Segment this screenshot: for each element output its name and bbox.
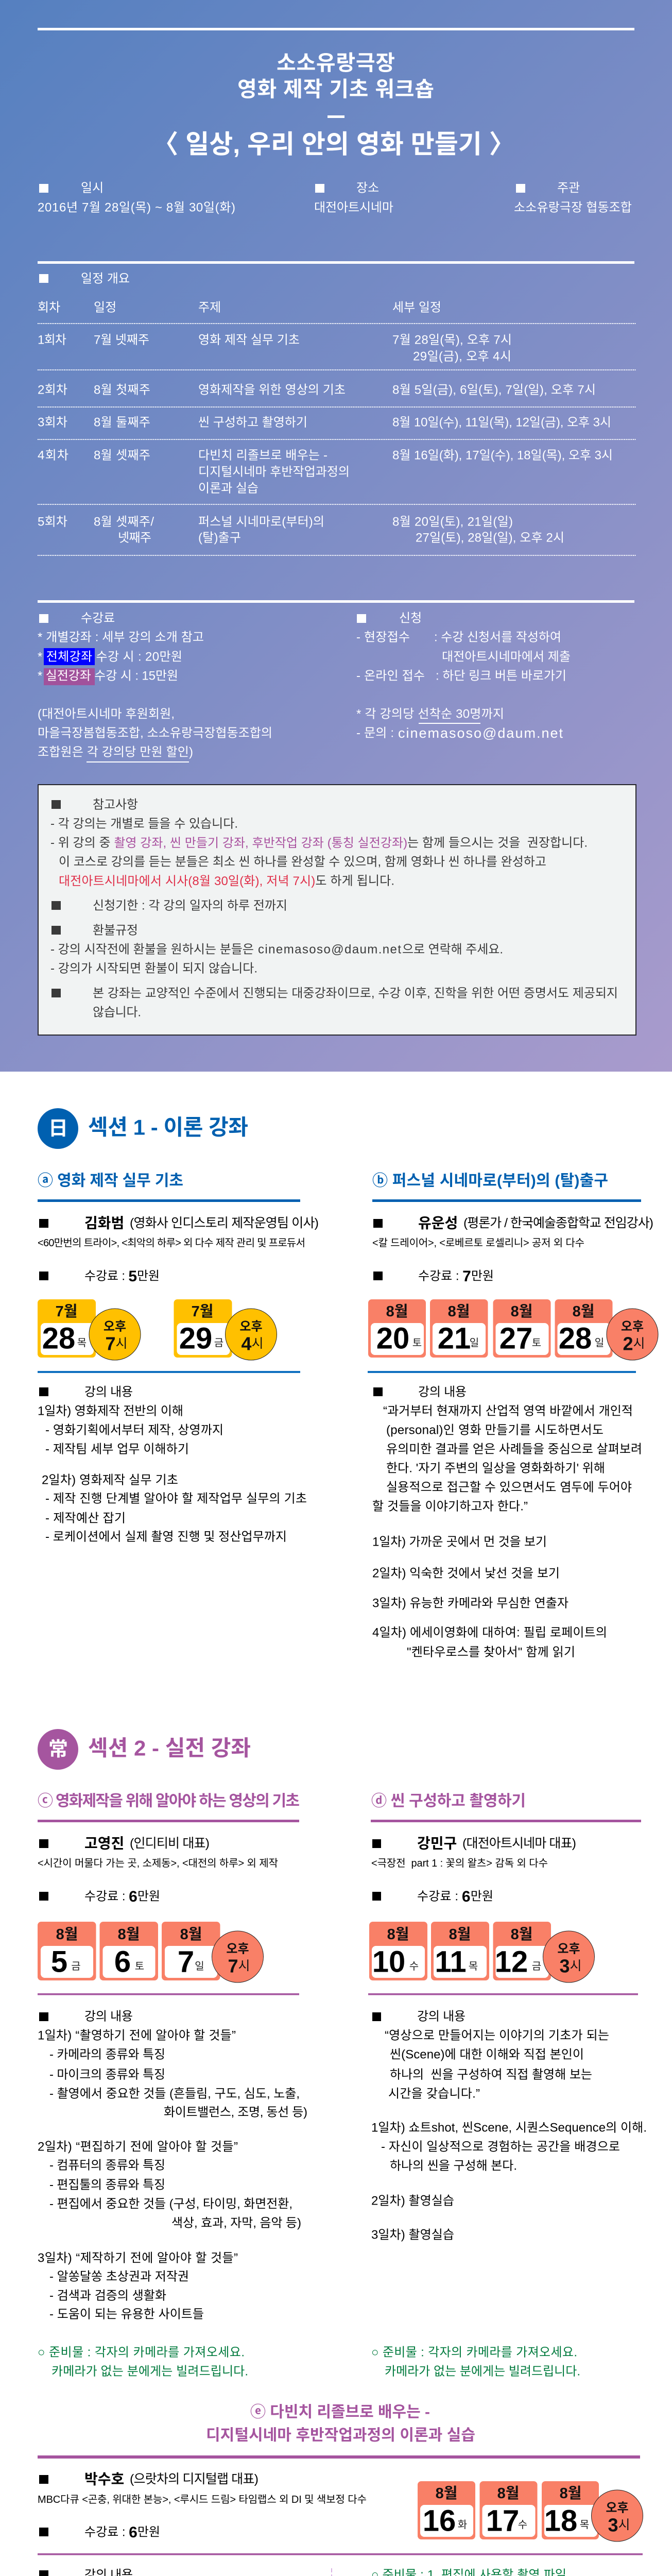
row 3: 8월 둘째주 [94,415,150,430]
row 4: 8월 셋째주 [94,448,150,463]
date badge: August 7 with time: 7 [178,1945,194,1978]
info: organizer [514,181,632,214]
lecture content: - 편집툴의 종류와 특징 [49,2178,165,2192]
date badge: August 18 with time [542,2481,643,2541]
row 1: 1회차 [38,333,66,347]
notes: certificate disclaimer: 않습니다. [93,1006,141,1019]
row 1: 7월 28일(목), 오후 7시 [392,333,512,347]
lecturer: (으랏차의 디지털랩 대표) [130,2472,259,2486]
title: theatre name: 소소유랑극장 [277,51,395,75]
lecture content [372,1385,642,1659]
panel: notes box [38,785,636,1035]
date badge: July 29: 7월 [192,1303,213,1320]
lecture content: - 마이크의 종류와 특징 [49,2068,165,2081]
panel: registration: - 문의 : [356,726,394,740]
date badge: August 27: 토 [532,1337,541,1349]
date badge: August 17 [480,2481,538,2539]
date badge: July 28: 28 [42,1322,75,1355]
lecture e heading [38,2404,640,2459]
lecture content: 1일차) “촬영하기 전에 알아야 할 것들” [38,2029,236,2042]
date badge: August 5: 금 [71,1961,81,1972]
date badge: July 29 [174,1299,277,1360]
row 4: 4회차 [38,448,68,463]
lecture content: 실용적으로 접근할 수 있으면서도 염두에 두어야 [386,1481,632,1494]
notes: deadline: 신청기한 : 각 강의 일자의 하루 전까지 [93,899,287,913]
lecture content: 유의미한 결과를 얻은 사례들을 중심으로 살펴보려 [386,1443,642,1456]
lecturer: (대전아트시네마 대표) [462,1836,576,1851]
table header row [38,301,441,314]
date badge: August 11: 8월 [449,1926,471,1943]
lecturer: 김화범 [84,1215,124,1231]
row 3 [38,415,611,430]
lecturer: <칼 드레이어>, <로베르토 로셀리니> 공저 외 다수 [372,1237,584,1249]
schedule heading [39,272,130,285]
lecture content [38,2009,307,2321]
preparation note: ○ 준비물 : 각자의 카메라를 가져오세요. [38,2345,245,2360]
date badge: August 28 with time [555,1299,658,1360]
date badge: August 11: 11 [435,1945,467,1978]
lecturer: <60만번의 트라이>, <최악의 하루> 외 다수 제작 관리 및 프로듀서 [38,1237,305,1249]
lecture content [38,1385,307,1544]
fee [39,2523,160,2541]
lecture content: - 카메라의 종류와 특징 [49,2047,165,2062]
highlight: full course [44,648,95,665]
lecture content: (personal)인 영화 만들기를 시도하면서도 [386,1423,604,1437]
discount note: (대전아트시네마 후원회원, [38,707,175,721]
row 2: 2회차 [38,383,67,397]
table header row: 세부 일정 [392,301,441,314]
date badge: August 16: 16 [423,2504,456,2538]
date badge: August 12 with time: 3시 [559,1956,582,1976]
icon: section 1 badge: 日 [48,1118,68,1140]
lecture content: - 검색과 검증의 생활화 [49,2289,166,2303]
row 1: 7월 넷째주 [94,333,149,347]
date badge: August 7 with time: 일 [195,1960,204,1972]
lecturer: (인디티비 대표) [130,1836,210,1851]
lecture content: 강의 내용 [84,2009,133,2024]
date badge: August 10: 수 [409,1961,419,1972]
row 5: 27일(토), 28일(일), 오후 2시 [416,531,564,545]
notes: references: - 각 강의는 개별로 들을 수 있습니다. [50,817,238,831]
lecture content: - 도움이 되는 유용한 사이트들 [49,2307,204,2321]
date badge: August 27: 27 [499,1322,532,1355]
lecture content: 3일차) “제작하기 전에 알아야 할 것들” [38,2251,238,2265]
section 2 heading [38,1729,251,1770]
preparation note [38,2345,248,2378]
panel: registration: : 하단 링크 버튼 바로가기 [436,669,566,683]
panel: lecture b [368,1173,658,1659]
date badge: August 21: 8월 [448,1303,470,1320]
notes: refund policy: - 강의가 시작되면 환불이 되지 않습니다. [50,961,257,976]
icon: section 1 badge [38,1108,78,1149]
lecturer: <극장전 part 1 : 꽃의 왈츠> 감독 외 다수 [371,1857,548,1869]
lecturer: 강민구 [417,1835,457,1852]
lecture content: 2일차) 영화제작 실무 기초 [42,1473,178,1487]
date badge: August 18 with time: 8월 [560,2485,581,2502]
info: venue: 장소 [356,181,379,195]
lecturer [38,1215,319,1249]
row 1 [38,333,512,364]
date badge: August 6 [100,1922,158,1980]
lecture e heading: ⓔ 다빈치 리졸브로 배우는 - [250,2404,430,2420]
row 3: 8월 10일(수), 11일(목), 12일(금), 오후 3시 [392,415,611,430]
date badge: August 12 with time: 금 [532,1961,541,1972]
lecturer: 유운성 [418,1215,458,1231]
date badge: August 10 [369,1922,427,1980]
date badge: July 29: 금 [214,1337,223,1349]
fee [39,1888,160,1905]
discount note: 조합원은 각 강의당 만원 할인) [38,745,193,759]
date badge: August 11: 목 [469,1961,478,1972]
fee: 수강료 : 6만원 [417,1888,493,1905]
date badge: July 28: 목 [77,1337,87,1349]
lecture b heading: ⓑ 퍼스널 시네마로(부터)의 (탈)출구 [372,1173,608,1189]
panel: fees: * 실전강좌 수강 시 : 15만원 [38,669,178,683]
date badge: July 29: 오후 [239,1320,263,1333]
panel: registration: * 각 강의당 선착순 30명까지 [356,707,504,721]
info: venue [314,181,393,214]
date badge: July 29: 4시 [241,1333,264,1354]
section 1 heading [38,1108,248,1149]
lecture content: 강의 내용 [417,2009,466,2024]
lecturer [371,1835,576,1869]
row 3: 3회차 [38,415,67,430]
date badge: August 28 with time: 8월 [573,1303,594,1320]
lecture content: - 알쏭달쏭 초상권과 저작권 [49,2270,189,2283]
row 2 [38,383,596,397]
fees heading [39,611,115,625]
panel: fees: * 개별강좌 : 세부 강의 소개 참고 [38,631,204,644]
date badge: August 5 [38,1922,96,1980]
row 2: 8월 첫째주 [94,383,150,397]
lecture content: 2일차) “편집하기 전에 알아야 할 것들” [38,2140,238,2154]
date badge: July 28 [38,1299,141,1360]
date badge: July 28: 7월 [56,1303,77,1320]
lecture content: 강의 내용 [418,1385,467,1399]
notes: refund policy: 으로 연락해 주세요. [402,943,503,956]
divider [368,1993,638,1995]
row 4: 8월 16일(화), 17일(수), 18일(목), 오후 3시 [392,448,613,463]
lecture content: 시간을 갖습니다.” [388,2087,480,2101]
schedule heading: 일정 개요 [81,272,130,285]
date badge: August 18 with time: 3시 [608,2514,630,2536]
lecture content: 하나의 씬을 구성해 본다. [390,2159,517,2173]
divider [368,1371,636,1373]
panel: lecture a [38,1173,319,1544]
fee: 수강료 : 5만원 [84,1267,160,1285]
lecture content: 1일차) 쇼트shot, 씬Scene, 시퀀스Sequence의 이해. [371,2121,647,2135]
date badge: August 10: 8월 [387,1926,409,1943]
row 3: 씬 구성하고 촬영하기 [198,415,307,430]
date badge: August 16 [418,2481,475,2539]
info: date: 2016년 7월 28일(목) ~ 8월 30일(화) [38,201,235,214]
lecture content: 화이트밸런스, 조명, 동선 등) [164,2105,307,2120]
panel: hero background [0,0,672,1072]
discount note: 마을극장봄협동조합, 소소유랑극장협동조합의 [38,726,272,740]
date badge: July 28: 7시 [105,1333,128,1354]
lecture content: - 제작 진행 단계별 알아야 할 제작업무 실무의 기초 [45,1492,307,1505]
date badge: August 7 with time: 7시 [228,1956,250,1976]
date badge: August 12 with time: 오후 [557,1942,580,1956]
preparation note: ○ 준비물 : 각자의 카메라를 가져오세요. [371,2345,577,2360]
notes: certificate disclaimer [51,986,618,1019]
lecture e heading: 디지털시네마 후반작업과정의 이론과 실습 [206,2427,475,2444]
title: subtitle: 〈 일상, 우리 안의 영화 만들기 〉 [152,130,515,159]
notes: references: 대전아트시네마에서 시사(8월 30일(화), 저녁 7시)도 하게 됩니다. [59,874,394,888]
section 1 heading: 섹션 1 - 이론 강좌 [88,1115,248,1140]
row 4: 디지털시네마 후반작업과정의 [198,465,350,479]
lecture content: - 자신이 일상적으로 경험하는 공간을 배경으로 [381,2140,620,2154]
lecture content: “영상으로 만들어지는 이야기의 기초가 되는 [385,2029,609,2042]
lecture c heading [38,1793,300,1822]
date badge: August 20 [368,1299,426,1358]
lecture content [38,2568,292,2576]
lecture a heading [38,1173,300,1202]
discount note [38,707,272,762]
lecturer: (영화사 인디스토리 제작운영팀 이사) [130,1216,319,1230]
lecture content: 1일차) 영화제작 전반의 이해 [38,1404,183,1418]
icon: section 2 badge [38,1729,78,1770]
lecturer: 박수호 [84,2471,124,2487]
date badge: August 16: 화 [458,2519,467,2531]
row 5: 넷째주 [118,531,151,545]
preparation note: 카메라가 없는 분에게는 빌려드립니다. [385,2365,580,2378]
lecture content: 강의 내용 [84,1385,133,1399]
highlight: practical course [44,668,95,685]
title: workshop name: 영화 제작 기초 워크숍 [237,77,434,101]
date badge: August 18 with time: 18 [544,2504,577,2538]
date badge: August 18 with time: 오후 [606,2501,629,2515]
table header row: 일정 [94,301,116,314]
date badge: August 7 with time: 오후 [226,1942,249,1956]
lecturer: <시간이 머물다 가는 곳, 소제동>, <대전의 하루> 외 제작 [38,1857,278,1869]
divider [38,2553,643,2555]
section 2 heading: 섹션 2 - 실전 강좌 [88,1736,251,1760]
lecture content: - 제작예산 잡기 [45,1512,126,1525]
panel: fees [38,600,634,762]
lecture content: 하나의 씬을 구성하여 직접 촬영해 보는 [390,2068,592,2081]
lecture content: - 촬영에서 중요한 것들 (흔들림, 구도, 심도, 노출, [49,2087,300,2101]
panel: registration: 신청 [399,611,422,625]
fee [39,1267,160,1285]
preparation note [371,2345,580,2378]
date badge: August 12 with time: 8월 [511,1926,532,1943]
lecture content: - 영화기획에서부터 제작, 상영까지 [45,1423,223,1437]
notes: refund policy: 환불규정 [93,923,138,938]
info: organizer: 주관 [557,181,580,195]
lecturer: (평론가 / 한국예술종합학교 전임강사) [463,1216,653,1230]
lecture content: 할 것들을 이야기하고자 한다.” [372,1499,528,1514]
date badge: August 28 with time: 2시 [623,1333,645,1354]
date badge: August 27: 8월 [511,1303,532,1320]
panel: registration: 대전아트시네마에서 제출 [442,650,571,664]
panel: lecture d [368,1793,647,2378]
fee [373,1267,494,1285]
date badge: August 10: 10 [372,1945,405,1978]
row 4: 다빈치 리졸브로 배우는 - [198,448,328,463]
date badge: August 7 with time: 8월 [180,1926,202,1943]
date badge: July 29: 29 [179,1322,212,1355]
lecture content: 씬(Scene)에 대한 이해와 직접 본인이 [390,2047,584,2062]
info: organizer: 소소유랑극장 협동조합 [514,201,632,214]
lecturer [372,1215,653,1249]
fee: 수강료 : 6만원 [84,2523,160,2541]
date badge: August 20: 8월 [386,1303,408,1320]
lecture content: 1일차) 가까운 곳에서 먼 것을 보기 [372,1535,547,1549]
row 5: 퍼스널 시네마로(부터)의 [198,515,324,529]
row 4 [38,448,613,496]
lecture content: 4일차) 에세이영화에 대하여: 필립 로페이트의 [372,1626,607,1639]
date badge: August 16: 8월 [436,2485,457,2502]
date badge: August 5: 8월 [56,1926,78,1943]
date badge: August 7 with time [162,1922,264,1982]
fee: 수강료 : 6만원 [84,1888,160,1905]
lecturer: MBC다큐 <곤충, 위대한 본능>, <루시드 드림> 타임랩스 외 DI 및 색보정 다수 [38,2494,367,2505]
table header row: 주제 [198,301,221,314]
table header row: 회차 [38,301,60,314]
date badge: August 6: 8월 [118,1926,140,1943]
fee [372,1888,493,1905]
date badge: August 17: 수 [518,2519,527,2531]
panel: schedule table [38,261,636,555]
lecturer [38,1835,278,1869]
lecture content: “과거부터 현재까지 산업적 영역 바깥에서 개인적 [383,1404,633,1418]
row 5: 5회차 [38,515,67,529]
fee: 수강료 : 7만원 [418,1267,494,1285]
panel: registration: - 온라인 접수 [356,669,425,683]
row 5 [38,515,564,545]
lecture a heading: ⓐ 영화 제작 실무 기초 [38,1173,183,1189]
date badge: August 17: 8월 [497,2485,519,2502]
lecture content: - 편집에서 중요한 것들 (구성, 타이밍, 화면전환, [49,2197,292,2211]
date badge: August 21: 21 [438,1322,471,1355]
notes: certificate disclaimer: 본 강좌는 교양적인 수준에서 진행되는 대중강좌이므로, 수강 이후, 진학을 위한 어떤 증명서도 제공되지 [93,986,618,1001]
notes: refund policy [50,923,503,976]
notes: references: - 위 강의 중 촬영 강좌, 씬 만들기 강좌, 후반작업 강좌 (통칭 실전강좌)는 함께 들으시는 것을 권장합니다. [50,836,588,850]
row 2: 8월 5일(금), 6일(토), 7일(일), 오후 7시 [392,383,596,397]
date badge: August 28 with time: 일 [595,1337,604,1349]
preparation note: 카메라가 없는 분에게는 빌려드립니다. [51,2365,248,2378]
lecture content: - 컴퓨터의 종류와 특징 [49,2159,165,2172]
panel: fees: * 전체강좌 수강 시 : 20만원 [38,650,182,664]
divider [38,1993,299,1995]
lecture d heading: ⓓ 씬 구성하고 촬영하기 [371,1793,526,1809]
divider [38,1371,300,1373]
date badge: August 21 [430,1299,488,1358]
row 1: 영화 제작 실무 기초 [198,333,300,347]
row 5: (탈)출구 [198,531,241,545]
row 5: 8월 셋째주/ [94,515,154,529]
date badge: July 28: 오후 [104,1320,126,1333]
lecture c heading: ⓒ 영화제작을 위해 알아야 하는 영상의 기초 [38,1793,300,1809]
lecture content: 3일차) 촬영실습 [371,2228,454,2242]
notes: refund policy: - 강의 시작전에 환불을 원하시는 분들은 [50,943,254,956]
panel: registration: : 수강 신청서를 작성하여 [434,631,561,644]
date badge: August 28 with time: 오후 [621,1320,644,1333]
lecture content: "켄타우로스를 찾아서" 함께 읽기 [407,1646,575,1659]
info: date: 일시 [81,181,104,195]
lecturer: 고영진 [84,1835,124,1852]
date badge: August 6: 토 [135,1961,144,1972]
panel: lecture c [38,1793,307,2378]
date badge: August 20: 토 [412,1337,422,1349]
row 4: 이론과 실습 [198,481,259,496]
panel: registration: - 현장접수 [356,631,410,644]
info: venue: 대전아트시네마 [314,201,393,214]
notes: refund policy: cinemasoso@daum.net [258,943,401,956]
panel: registration: cinemasoso@daum.net [398,725,563,741]
panel: lecture e [38,2404,643,2576]
date badge: August 11 [431,1922,489,1980]
lecturer [38,2471,367,2505]
date badge: August 27 [493,1299,551,1358]
panel: registration [356,611,571,741]
notes: references [50,798,588,888]
row 5: 8월 20일(토), 21일(일) [392,515,513,529]
notes: references: 참고사항 [93,798,138,812]
lecture content: - 로케이션에서 실제 촬영 진행 및 정산업무까지 [45,1530,287,1544]
lecture content: 3일차) 유능한 카메라와 무심한 연출자 [372,1596,568,1611]
lecture b heading [372,1173,641,1202]
row 2: 영화제작을 위한 영상의 기초 [198,383,346,397]
date badge: August 12 with time [493,1922,594,1982]
lecture content: 2일차) 익숙한 것에서 낯선 것을 보기 [372,1566,560,1581]
date badge: August 5: 5 [51,1945,67,1978]
lecture content: 한다. '자기 주변의 일상을 영화화하기' 위해 [386,1461,605,1476]
date badge: August 21: 일 [470,1337,479,1349]
lecture content: 색상, 효과, 자막, 음악 등) [171,2216,301,2230]
date badge: August 20: 20 [376,1322,409,1355]
info: date [38,181,235,214]
title divider dash [328,115,344,118]
date badge: August 17: 17 [486,2504,519,2538]
lecture d heading [371,1793,641,1822]
date badge: August 18 with time: 목 [580,2519,589,2531]
icon: section 2 badge: 常 [48,1739,68,1760]
panel: workshop title [38,28,634,159]
notes: references: 이 코스로 강의를 듣는 분들은 최소 씬 하나를 완성할 수 있으며, 함께 영화나 씬 하나를 완성하고 [59,855,546,869]
lecture content [371,2009,647,2242]
fees heading: 수강료 [81,611,115,625]
date badge: August 6: 6 [114,1945,131,1978]
lecture content: 2일차) 촬영실습 [371,2194,454,2208]
date badge: August 28 with time: 28 [559,1322,592,1355]
row 1: 29일(금), 오후 4시 [413,349,511,364]
date badge: August 12 with time: 12 [495,1945,528,1978]
lecture content: - 제작팀 세부 업무 이해하기 [45,1443,189,1456]
